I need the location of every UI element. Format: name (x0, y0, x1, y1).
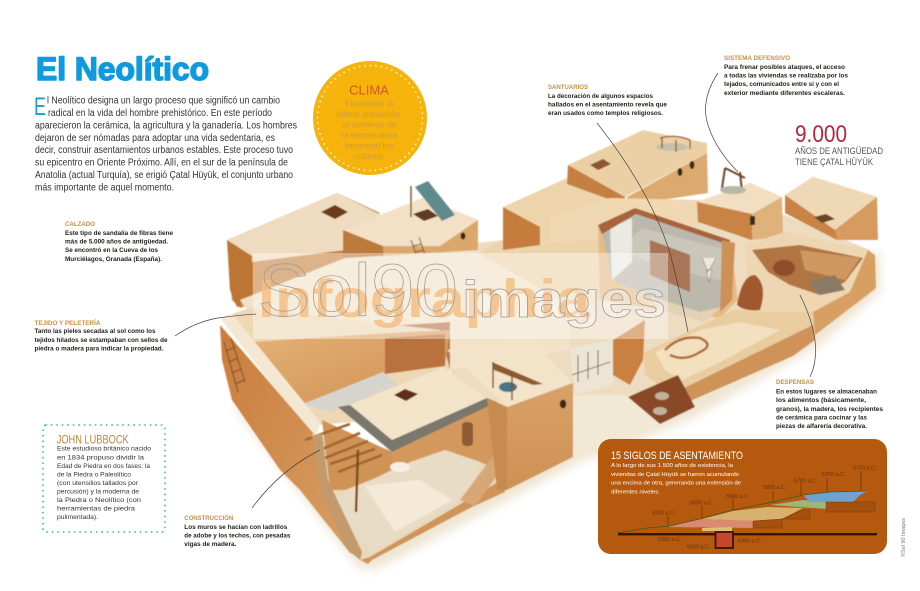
label: despensas: piezas de alfarería decorativa. (776, 423, 867, 430)
chart: settlement cross-section: 6200 a.C. (652, 510, 675, 516)
label: sistema defensivo: exterior mediante diferentes escaleras. (724, 90, 845, 97)
label: construcción: CONSTRUCCIÓN (184, 514, 234, 522)
label: santuarios: hallados en el asentamiento revela que (548, 102, 668, 108)
room: storage with jars (735, 232, 876, 350)
image credit: ©Sol 90 Images (900, 517, 907, 557)
label: despensas: En estos lugares se almacenaban (776, 388, 877, 396)
panel: 15 siglos de asentamiento chart (598, 439, 887, 554)
chart: settlement cross-section (618, 466, 877, 550)
chart: settlement cross-section: 5750 a.C. (822, 472, 845, 478)
label: tejido y peletería: tejidos hilados se estampaban con sellos de (34, 337, 168, 344)
stat: 9.000 años: AÑOS DE ANTIGÜEDAD (795, 145, 883, 156)
label: tejido y peletería: TEJIDO Y PELETERÍA (34, 319, 101, 327)
panel: Çatal Hüyük settlement illustration (220, 130, 880, 570)
label: santuarios: La decoración de algunos espacios (548, 93, 654, 100)
panel: 15 siglos de asentamiento chart: A lo largo de sus 1.500 años de existencia, la (611, 463, 734, 469)
label: despensas: de cerámica para cocinar y las (776, 414, 868, 422)
label: sistema defensivo (724, 55, 849, 97)
panel: John Lubbock (43, 425, 165, 532)
stat: 9.000 años (795, 121, 883, 167)
title: El Neolítico (36, 51, 209, 87)
label: tejido y peletería: Tanto las pieles secadas al sol como los (34, 328, 156, 335)
chart: settlement cross-section: 5780 a.C. (794, 478, 817, 484)
panel: John Lubbock: de la Piedra o Paleolítico (57, 472, 132, 478)
panel: John Lubbock: JOHN LUBBOCK (57, 432, 129, 446)
callout: clima circle: la temperatura (342, 130, 397, 140)
intro text block: dejaron de ser nómadas para adoptar una vida sedentaria, es (35, 133, 275, 144)
intro text block: radical en la vida del hombre prehistórico. En este período (48, 108, 272, 119)
panel: John Lubbock: pulimentada). (57, 514, 98, 521)
intro text block: l Neolítico designa un largo proceso que significó un cambio (47, 96, 280, 107)
label: despensas (776, 379, 884, 430)
callout: clima circle: CLIMA (349, 82, 389, 98)
panel: John Lubbock: la Piedra o Neolítico (con (57, 497, 142, 504)
label: construcción: Los muros se hacían con ladrillos (184, 524, 288, 531)
label: tejido y peletería (34, 319, 168, 352)
label: calzado: Murciélagos, Granada (España). (65, 256, 162, 263)
intro text block: aparecieron la cerámica, la agricultura y la ganadería. Los hombres (35, 120, 297, 131)
panel: John Lubbock: percusión) y la moderna de (57, 488, 140, 496)
watermark band and logo text: Infographia (258, 269, 591, 329)
label: calzado: CALZADO (65, 221, 95, 228)
panel: 15 siglos de asentamiento chart: viviendas de Çatal Hüyük se fueron acumulando (611, 472, 739, 478)
label: calzado: Este tipo de sandalia de fibras tiene (65, 230, 174, 237)
watermark band and logo text (253, 249, 668, 339)
label: santuarios: SANTUARIOS (548, 84, 588, 91)
label: despensas: DESPENSAS (776, 379, 814, 386)
label: sistema defensivo: SISTEMA DEFENSIVO (724, 55, 790, 62)
label: sistema defensivo: a todas las viviendas se realizaba por los (724, 72, 849, 80)
panel: John Lubbock: en 1834 propuso dividir la (57, 454, 145, 462)
watermark band and logo text: Sol90 (258, 249, 458, 332)
panel: John Lubbock: Este estudioso británico nacido (57, 446, 152, 452)
intro text block: decir, construir asentamientos urbanos estables. Este proceso tuvo (35, 145, 293, 156)
intro text block: más importante de aquel momento. (35, 182, 174, 193)
building: right towers (697, 168, 878, 240)
room: lower cutaway house (305, 367, 507, 564)
chart: settlement cross-section: 6300 a.C. (658, 537, 681, 543)
label: construcción (184, 514, 291, 548)
building: house with solar awning (343, 181, 478, 275)
building: back left house (227, 193, 395, 308)
label: calzado: Se encontró en la Cueva de los (65, 247, 159, 254)
chart: settlement cross-section: 5800 a.C. (763, 485, 786, 491)
panel: John Lubbock: (con utensilios tallados por (57, 480, 138, 487)
callout: clima circle (313, 61, 427, 175)
label: sistema defensivo: Para frenar posibles ataques, el acceso (724, 64, 845, 71)
label: construcción: de adobe y los techos, con pesadas (184, 532, 291, 540)
building: middle plaza roofs (240, 240, 620, 372)
chart: settlement cross-section: 6500 a.C. (687, 544, 710, 550)
building: foreground tower with awning (447, 340, 573, 490)
leader lines (175, 73, 816, 508)
intro text block: Anatolia (actual Turquía), se erigió Çatal Hüyük, el conjunto urbano (35, 170, 293, 181)
chart: settlement cross-section: 5900 a.C. (726, 494, 749, 500)
chart: settlement cross-section: 5700 a.C. (853, 466, 876, 472)
panel: John Lubbock: Edad de Piedra en dos fases: la (57, 463, 151, 470)
label: construcción: vigas de madera. (184, 541, 237, 548)
panel: 15 siglos de asentamiento chart: una encima de otra, generando una extensión de (611, 481, 741, 487)
room: shrine cutaway (598, 208, 738, 322)
label: tejido y peletería: piedra o madera para indicar la propiedad. (34, 346, 164, 352)
callout: clima circle: cultivos. (354, 151, 385, 161)
chart: settlement cross-section: 6000 a.C. (690, 500, 713, 506)
stat: 9.000 años: 9.000 (795, 121, 847, 148)
panel: John Lubbock: herramientas de piedra (57, 506, 136, 512)
label: santuarios: eran usados como templos religiosos. (548, 110, 663, 117)
panel: 15 siglos de asentamiento chart: 15 SIGLOS DE ASENTAMIENTO (611, 450, 743, 462)
stat: 9.000 años: TIENE ÇATAL HÜYÜK (795, 156, 874, 167)
chart: settlement cross-section: 6300 a.C. (738, 538, 761, 544)
building: back centre-right house (503, 130, 708, 250)
label: calzado: más de 5.000 años de antigüedad. (65, 238, 168, 246)
watermark band and logo text: images (462, 271, 666, 329)
label: santuarios (548, 84, 668, 117)
label: calzado (65, 221, 174, 263)
panel: 15 siglos de asentamiento chart: diferentes niveles. (611, 489, 660, 495)
building: foreground large walled room (220, 308, 450, 558)
label: sistema defensivo: tejados, comunicados entre sí y con el (724, 81, 839, 88)
room: courtyard (570, 310, 815, 424)
intro text block: E (34, 93, 46, 121)
label: despensas: los alimentos (básicamente, (776, 397, 866, 404)
callout: clima circle: Finalizada la (345, 98, 394, 108)
callout: clima circle: última glaciación, (337, 109, 402, 119)
callout: clima circle: favoreció los (345, 140, 394, 150)
callout: clima circle: el aumento de (342, 120, 397, 130)
intro text block: su epicentro en Oriente Próximo. Allí, en el sur de la península de (35, 158, 288, 169)
label: despensas: granos), la madera, los recipientes (776, 406, 884, 413)
intro text block (34, 93, 297, 193)
